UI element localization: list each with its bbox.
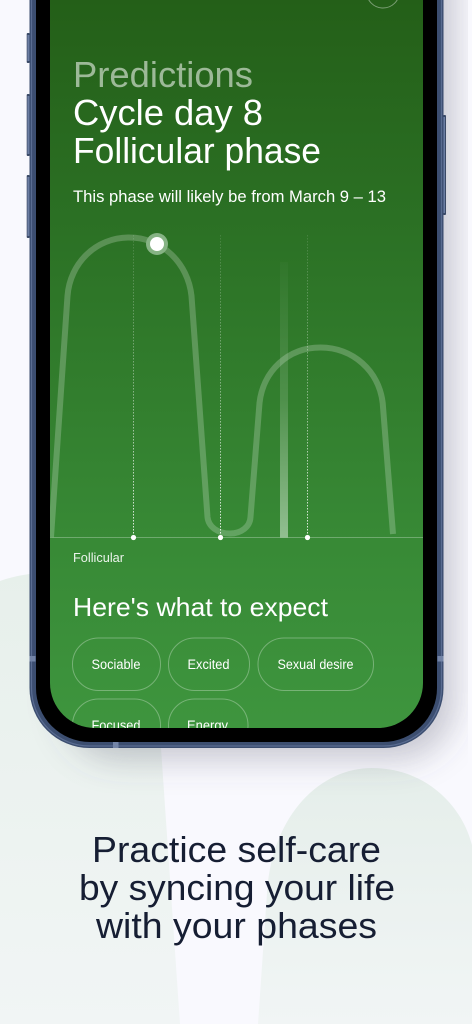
baseline [50, 537, 423, 538]
chip: focused [72, 698, 161, 728]
chip: sociable: Sociable [92, 657, 140, 672]
heading: predictions: Predictions [73, 54, 253, 95]
antenna bands [30, 656, 444, 748]
right arch shape [258, 768, 472, 1024]
bezel [36, 0, 437, 742]
chip: focused: Focused [92, 718, 140, 733]
heading: cycle day: Cycle day 8 [73, 92, 263, 133]
frame highlight [32, 0, 442, 746]
phone [27, 0, 446, 752]
chip: excited [168, 638, 250, 690]
current position marker [146, 233, 168, 255]
phase dates text: This phase will likely be from March 9 – 13 [73, 187, 386, 206]
heading: what to expect: Here's what to expect [73, 592, 329, 622]
chart: cycle curve [50, 233, 423, 540]
chip: sociable [72, 638, 160, 690]
tagline line 1: Practice self-care [92, 829, 381, 870]
phone shadow [62, 0, 455, 760]
chip: sexual desire: Sexual desire [278, 657, 354, 672]
phone frame [30, 0, 444, 748]
tagline line 3: with your phases [95, 905, 377, 946]
tagline line 2: by syncing your life [79, 867, 395, 908]
heading: phase: Follicular phase [73, 130, 321, 171]
axis dots [131, 535, 310, 540]
chip: energy [168, 698, 248, 728]
side buttons [27, 33, 446, 238]
screen [50, 0, 423, 752]
chip: sexual desire [258, 638, 374, 690]
chips [72, 638, 374, 728]
tagline [79, 829, 395, 946]
chip: excited: Excited [188, 657, 230, 672]
hormone bar [280, 262, 288, 538]
screen background [50, 0, 423, 728]
phase label: Follicular [73, 550, 125, 565]
left arch shape [0, 573, 180, 1024]
dashed guides [134, 235, 308, 537]
top right button [366, 0, 400, 8]
chip: energy: Energy [187, 718, 228, 733]
curve line [51, 238, 393, 537]
